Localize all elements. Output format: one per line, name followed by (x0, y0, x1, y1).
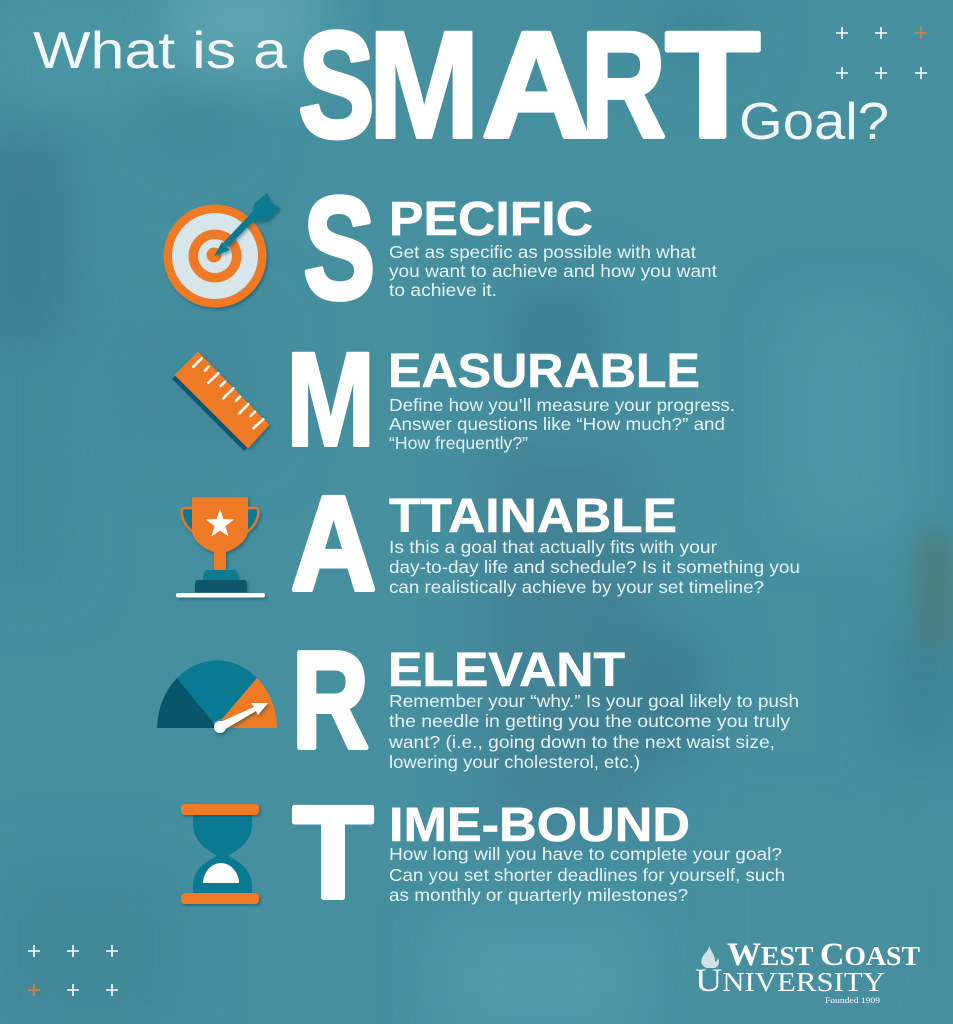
description: Relevant: the needle in getting you the outcome you truly (389, 711, 790, 731)
big letter A: A (291, 468, 376, 618)
heading: Specific: PECIFIC (389, 192, 593, 246)
title: Goal?: Goal? (739, 93, 889, 151)
row: Relevant (157, 624, 799, 778)
description: Measurable (389, 395, 735, 453)
logo wordmark: WEST COAST (727, 937, 920, 973)
title: What is a: What is a (33, 22, 287, 80)
logo: West Coast University (695, 937, 920, 1005)
title: SMART: M (368, 0, 480, 170)
description: Time-bound: Can you set shorter deadlines for yourself, such (389, 865, 785, 885)
description: Time-bound: as monthly or quarterly milestones? (389, 885, 688, 905)
logo wordmark: UNIVERSITY (695, 963, 885, 999)
description: Relevant: Remember your “why.” Is your goal likely to push (389, 691, 799, 711)
row: Time-bound (181, 778, 785, 926)
description: Attainable: day-to-day life and schedule? Is it something you (389, 557, 800, 577)
description: Time-bound (389, 844, 785, 905)
title: SMART (298, 0, 760, 170)
icon: target with arrow (164, 193, 280, 308)
decorative plus signs: bottom left (28, 945, 118, 996)
title: SMART: R (581, 0, 665, 169)
title (33, 0, 889, 170)
heading: Measurable: EASURABLE (388, 344, 700, 398)
description: Attainable (389, 537, 800, 597)
big letter S: S (304, 168, 375, 330)
title: SMART: T (666, 2, 760, 169)
big letter M: M (286, 324, 375, 474)
row: Measurable (172, 324, 735, 474)
description: Specific: to achieve it. (389, 280, 497, 300)
heading: Attainable: TTAINABLE (389, 489, 677, 543)
description: Attainable: Is this a goal that actually fits with your (389, 537, 717, 557)
logo wordmark: Founded 1909 (825, 995, 880, 1005)
row: Specific (164, 168, 717, 330)
row: Attainable (176, 468, 800, 618)
heading: Time-bound: IME-BOUND (389, 798, 690, 852)
description: Relevant (388, 691, 799, 772)
description: Specific: you want to achieve and how you want (389, 261, 717, 281)
big letter T: T (293, 778, 373, 926)
description: Measurable: Answer questions like “How much?” and (389, 414, 725, 434)
description: Measurable: “How frequently?” (389, 433, 528, 453)
icon: ruler (172, 353, 268, 451)
icon: flame (701, 945, 719, 968)
decorative plus signs: top right (836, 27, 927, 79)
logo wordmark (695, 937, 920, 1005)
title: SMART: S (298, 1, 375, 169)
description: Specific: Get as specific as possible with what (389, 242, 696, 262)
description: Time-bound: How long will you have to complete your goal? (389, 844, 782, 864)
description: Relevant: want? (i.e., going down to the next waist size, (388, 732, 775, 752)
description: Attainable: can realistically achieve by your set timeline? (389, 577, 764, 597)
description: Specific (389, 242, 717, 300)
heading: Relevant: ELEVANT (388, 643, 625, 697)
icon: speedometer gauge (157, 660, 277, 733)
icon: trophy (176, 497, 265, 598)
title: SMART: A (482, 0, 590, 168)
big letter R: R (292, 624, 369, 778)
icon: hourglass (181, 804, 259, 904)
description: Measurable: Define how you’ll measure your progress. (389, 395, 735, 415)
description: Relevant: lowering your cholesterol, etc.) (389, 752, 640, 772)
